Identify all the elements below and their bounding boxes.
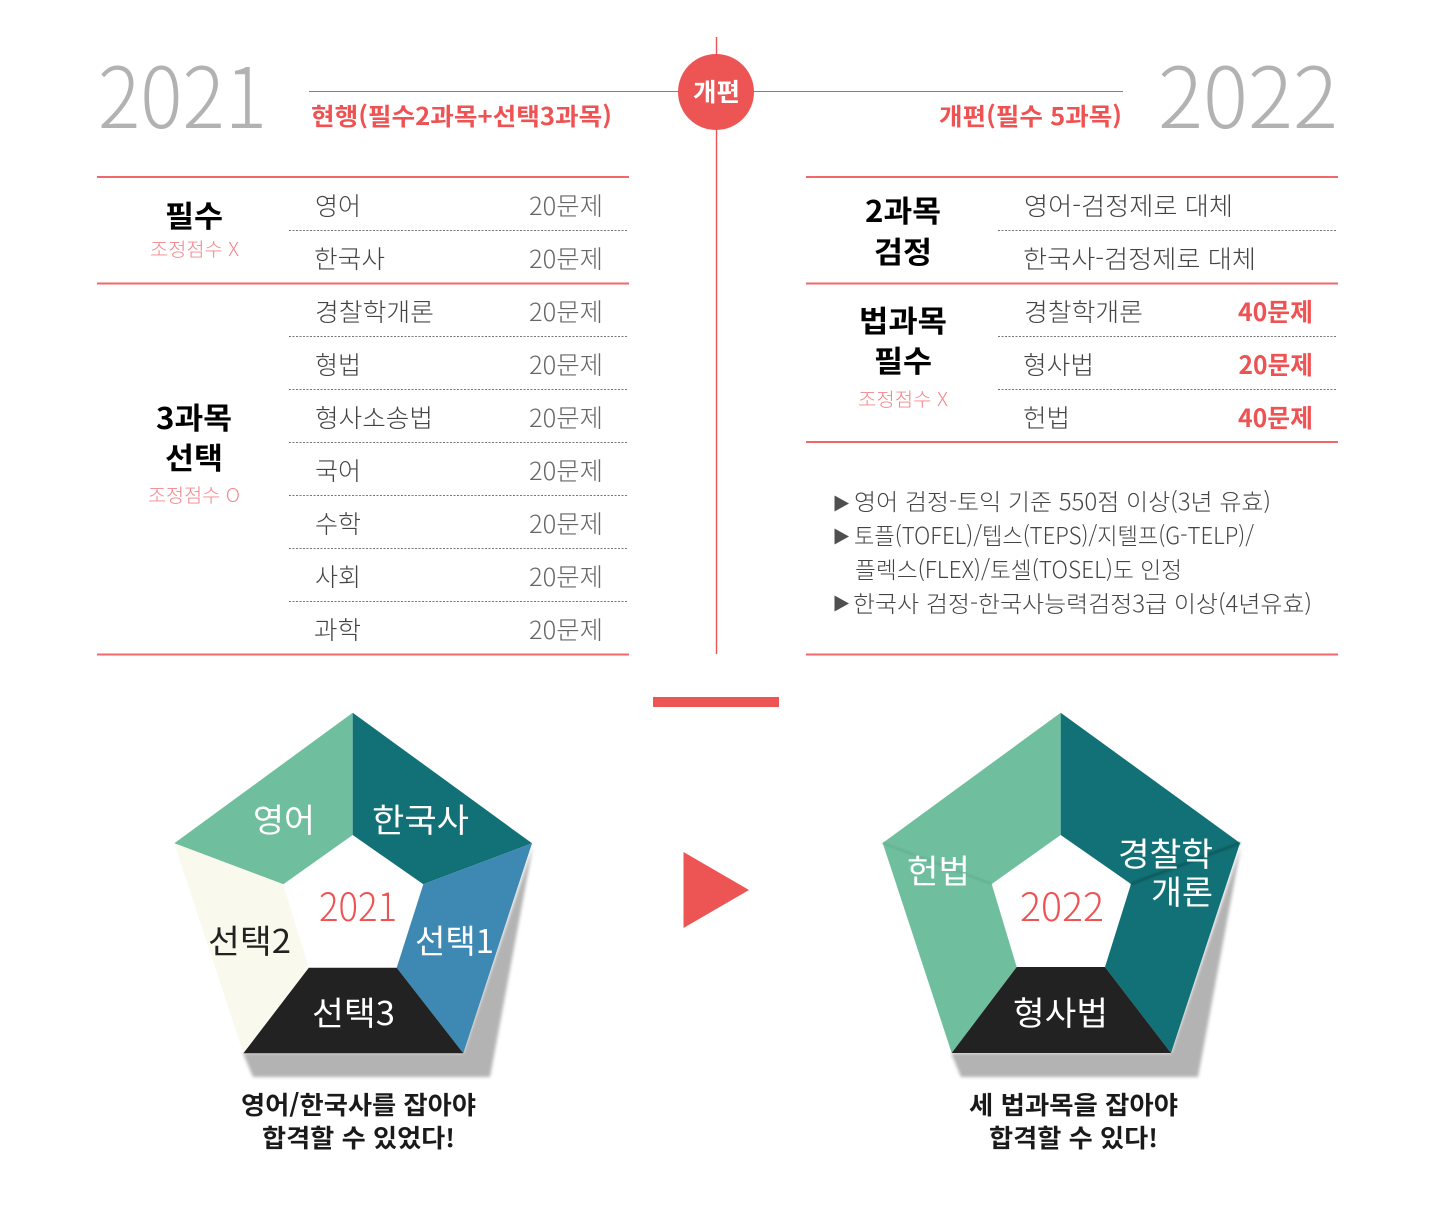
segment: police science	[1061, 713, 1240, 1053]
subject rows 2021: 국어	[315, 452, 361, 488]
segment: constitutional law	[883, 713, 1061, 1053]
subject rows 2021: 20문제	[529, 399, 603, 435]
segment: elective 1	[397, 843, 532, 1053]
subject rows 2021: 20문제	[529, 611, 603, 647]
pentagon 2021	[174, 713, 533, 1077]
segment: English	[174, 713, 353, 884]
subject rows 2021: 20문제	[529, 346, 603, 382]
category: three elective subjects	[148, 394, 240, 508]
segment: elective 2: 선택2	[208, 915, 291, 963]
subject rows 2022: 40문제	[1238, 293, 1313, 329]
badge: reform: 개편	[693, 73, 740, 109]
segment: elective 2	[174, 843, 309, 1053]
pentagon 2022	[883, 713, 1241, 1077]
subject rows 2021: 20문제	[529, 240, 603, 276]
reformed system subtitle: 개편(필수 5과목)	[939, 97, 1122, 132]
subject rows 2021: 20문제	[529, 187, 603, 223]
segment: elective 3: 선택3	[312, 987, 395, 1035]
year 2022: 2022	[1158, 32, 1338, 153]
table: 2021 subjects	[97, 177, 629, 654]
category: law subjects required: 필수	[874, 337, 932, 381]
segment: English: 영어	[253, 794, 315, 842]
category: two subjects certified	[865, 187, 941, 272]
center year 2021: 2021	[319, 877, 397, 933]
category: two subjects certified: 검정	[874, 228, 932, 272]
certification notes: 플렉스(FLEX)/토셀(TOSEL)도 인정	[855, 551, 1182, 585]
accent bar	[653, 697, 779, 707]
category: required	[150, 192, 239, 262]
subject rows 2022: 영어-검정제로 대체	[1024, 187, 1233, 223]
subject rows 2022: 20문제	[1238, 346, 1313, 382]
current system subtitle: 현행(필수2과목+선택3과목)	[311, 97, 612, 132]
subject rows 2021: 20문제	[529, 293, 603, 329]
subject rows 2022: 40문제	[1238, 399, 1313, 435]
segment: police science: 경찰학	[1118, 828, 1213, 876]
badge: reform	[678, 54, 1123, 130]
subject rows 2022: 경찰학개론	[1024, 293, 1143, 329]
subject rows 2021: 한국사	[314, 240, 385, 276]
vertical center divider	[716, 37, 718, 654]
certification notes	[834, 483, 1312, 619]
arrow	[684, 852, 749, 928]
category: three elective subjects: 3과목	[156, 394, 232, 438]
category: law subjects required	[858, 297, 948, 412]
category: law subjects required: 법과목	[859, 297, 947, 341]
certification notes: 한국사 검정-한국사능력검정3급 이상(4년유효)	[853, 585, 1312, 619]
subject rows 2021: 20문제	[529, 558, 603, 594]
subject rows 2021: 과학	[314, 611, 361, 647]
subject rows 2021: 20문제	[529, 505, 603, 541]
category: required: 필수	[165, 192, 223, 236]
segment: criminal law	[952, 967, 1171, 1053]
subject rows 2021: 형법	[315, 346, 361, 382]
subject rows 2021: 20문제	[529, 452, 603, 488]
table: 2022 subjects	[806, 177, 1338, 654]
category: two subjects certified: 2과목	[865, 187, 941, 231]
caption 2022: 세 법과목을 잡아야	[969, 1086, 1178, 1122]
subject rows 2021: 형사소송법	[315, 399, 433, 435]
subject rows 2022: 한국사-검정제로 대체	[1023, 240, 1256, 276]
subject rows 2021: 경찰학개론	[315, 293, 434, 329]
subject rows 2021	[314, 187, 603, 647]
segment: elective 1: 선택1	[415, 915, 494, 963]
year 2021: 2021	[98, 32, 267, 153]
subject rows 2021: 영어	[315, 187, 361, 223]
category: three elective subjects: 조정점수 O	[148, 481, 240, 508]
subject rows 2022: 형사법	[1023, 346, 1094, 382]
segment: criminal law: 형사법	[1013, 987, 1108, 1035]
category: three elective subjects: 선택	[165, 434, 223, 478]
center year 2022: 2022	[1020, 877, 1104, 933]
subject rows 2022: 헌법	[1023, 399, 1070, 435]
segment: Korean history: 한국사	[372, 794, 469, 842]
subject rows 2022	[1023, 187, 1313, 435]
category: required: 조정점수 X	[150, 235, 239, 262]
certification notes: 영어 검정-토익 기준 550점 이상(3년 유효)	[854, 483, 1271, 517]
segment: constitutional law: 헌법	[907, 845, 970, 893]
segment: elective 3	[243, 968, 463, 1053]
caption 2022: 합격할 수 있다!	[989, 1119, 1158, 1155]
caption 2021	[241, 1086, 476, 1155]
header: 2022	[939, 32, 1338, 153]
header: 2021	[98, 32, 680, 153]
caption 2022	[969, 1086, 1178, 1155]
category: law subjects required: 조정점수 X	[858, 385, 948, 412]
segment: Korean history	[353, 713, 532, 884]
certification notes: 토플(TOFEL)/텝스(TEPS)/지텔프(G-TELP)/	[854, 517, 1254, 551]
segment: police science: 개론	[1151, 866, 1213, 914]
subject rows 2021: 사회	[315, 558, 361, 594]
caption 2021: 합격할 수 있었다!	[262, 1119, 455, 1155]
subject rows 2021: 수학	[315, 505, 361, 541]
caption 2021: 영어/한국사를 잡아야	[241, 1086, 476, 1122]
